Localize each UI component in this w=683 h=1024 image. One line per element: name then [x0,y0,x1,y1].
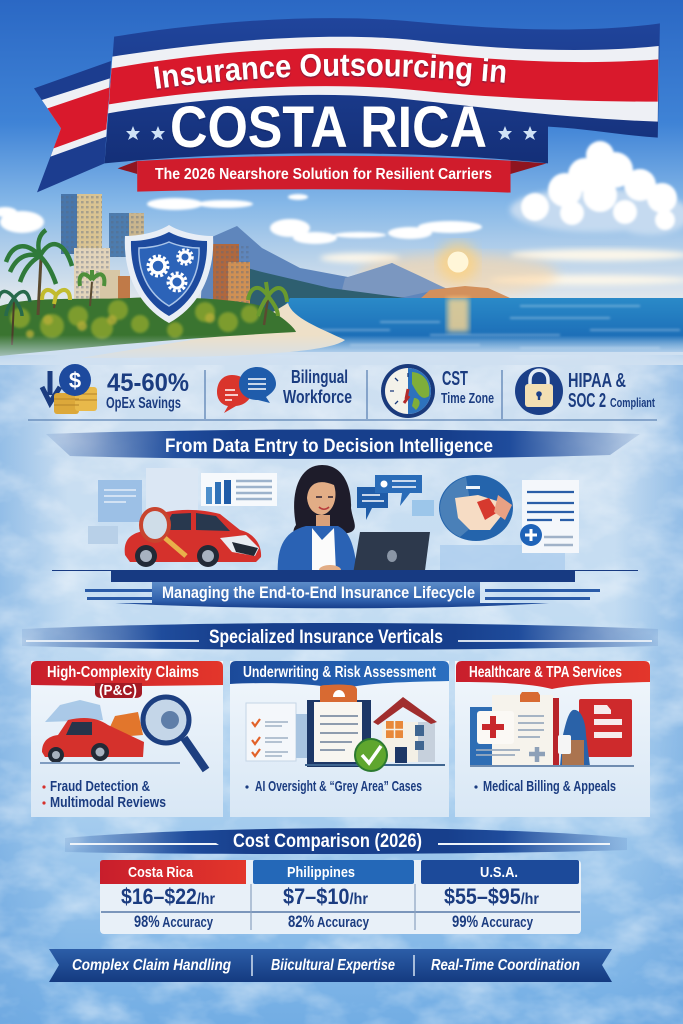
panel: underwriting [230,661,449,817]
icon: clipboard [307,684,371,767]
column: U.S.A.: U.S.A. [480,864,518,881]
mountains [200,226,510,312]
speech bubbles [357,475,434,520]
title line two: COSTA RICA [170,95,487,160]
subtitle: The 2026 Nearshore Solution for Resilient Carriers [155,166,492,183]
card title: Underwriting & Risk Assessment [243,664,436,681]
icon: house [305,697,445,765]
fade to page [0,335,683,365]
column: Costa Rica [100,860,246,931]
panel: high-complexity claims [31,661,223,817]
icon: medical documents [470,692,559,766]
lifecycle banner [52,570,638,608]
card bullets [42,778,166,811]
card title: Healthcare & TPA Services [469,664,622,681]
column: U.S.A.: 99% Accuracy [452,912,534,931]
footer ribbon [49,949,612,982]
beach [80,303,345,358]
footer ribbon: Complex Claim Handling [72,957,231,974]
sea [250,298,683,352]
footer ribbon: Real-Time Coordination [431,957,580,974]
column: Costa Rica: 98% Accuracy [134,912,213,931]
tag [95,683,142,698]
column: U.S.A. [421,860,579,931]
kpi: savings [42,364,189,414]
icon: padlock [515,367,563,415]
kpi: savings: 45-60% [107,369,189,397]
kpi: savings: OpEx Savings [106,395,181,412]
title line one: Insurance Outsourcing in [153,54,506,90]
icon: shield with gears [125,225,213,323]
illustration: insurance lifecycle [88,465,579,580]
kpi: bilingual: Workforce [283,387,352,407]
header banner [34,18,660,193]
card bullet [245,778,422,795]
scene: coastal landscape [0,141,683,365]
icon: coins and arrow [42,364,97,414]
icon: checklist [246,703,307,761]
card bullet [474,778,616,795]
sun reflection [447,298,469,332]
column: Philippines: 82% Accuracy [288,912,370,931]
icon: clock globe [381,364,435,418]
icon: red car with magnifier [125,509,261,567]
icon: crashed car and magnifier [40,697,206,770]
icon: person [470,710,634,766]
section banner: decision intelligence [46,430,640,459]
comparison table [100,860,581,934]
card bullet: AI Oversight & “Grey Area” Cases [255,778,422,795]
stars [126,126,537,140]
kpi: bilingual: Bilingual [291,367,348,387]
lifecycle banner: Managing the End-to-End Insurance Lifecycle [162,583,475,602]
kpi: time zone: Time Zone [441,390,494,407]
panel: healthcare [455,661,650,817]
kpi: time zone: CST [442,368,468,390]
kpi: compliance: Compliant [610,395,655,410]
column: Philippines: Philippines [287,864,355,881]
chart card [201,473,277,506]
sun [358,242,558,297]
column: Philippines [253,860,414,931]
document with plus [440,480,579,573]
document panels [88,468,198,544]
card header [230,661,449,690]
footer ribbon: Biicultural Expertise [271,957,395,974]
card header [456,661,650,689]
icon: speech bubbles [217,367,276,413]
woman at laptop [278,465,358,580]
palms and greenery [0,230,296,356]
column: U.S.A.: $55–$95/hr [444,884,539,909]
kpi: compliance: HIPAA & [568,370,626,392]
card bullets: Fraud Detection & [50,778,150,795]
column: Costa Rica: Costa Rica [128,864,194,881]
ribbon shapes [34,18,660,193]
waves [320,306,680,348]
icon: green check [355,739,387,771]
section banner: decision intelligence: From Data Entry to Decision Intelligence [165,436,493,457]
KPI row [28,364,657,420]
card bullets: Multimodal Reviews [50,794,166,811]
kpi: bilingual [217,367,352,413]
kpi: compliance: SOC 2 [568,390,606,412]
card title: High-Complexity Claims [47,664,199,681]
section banner: verticals [22,623,658,650]
buildings [61,194,250,310]
icon: coins and arrow: $ [69,368,81,393]
section banner: verticals: Specialized Insurance Verticals [209,627,443,648]
section banner: cost comparison [65,828,627,854]
kpi: time zone [381,364,494,418]
card bullet: Medical Billing & Appeals [483,778,616,795]
column: Philippines: $7–$10/hr [283,884,368,909]
laptop [352,532,430,580]
clouds [0,141,683,285]
card header [31,661,223,690]
icon: handshake circle [439,475,513,541]
column: Costa Rica: $16–$22/hr [121,884,215,909]
kpi: compliance [515,367,655,415]
icon: red file panel [579,699,632,757]
section banner: cost comparison: Cost Comparison (2026) [233,831,422,852]
card title suffix: (P&C) [99,682,137,699]
